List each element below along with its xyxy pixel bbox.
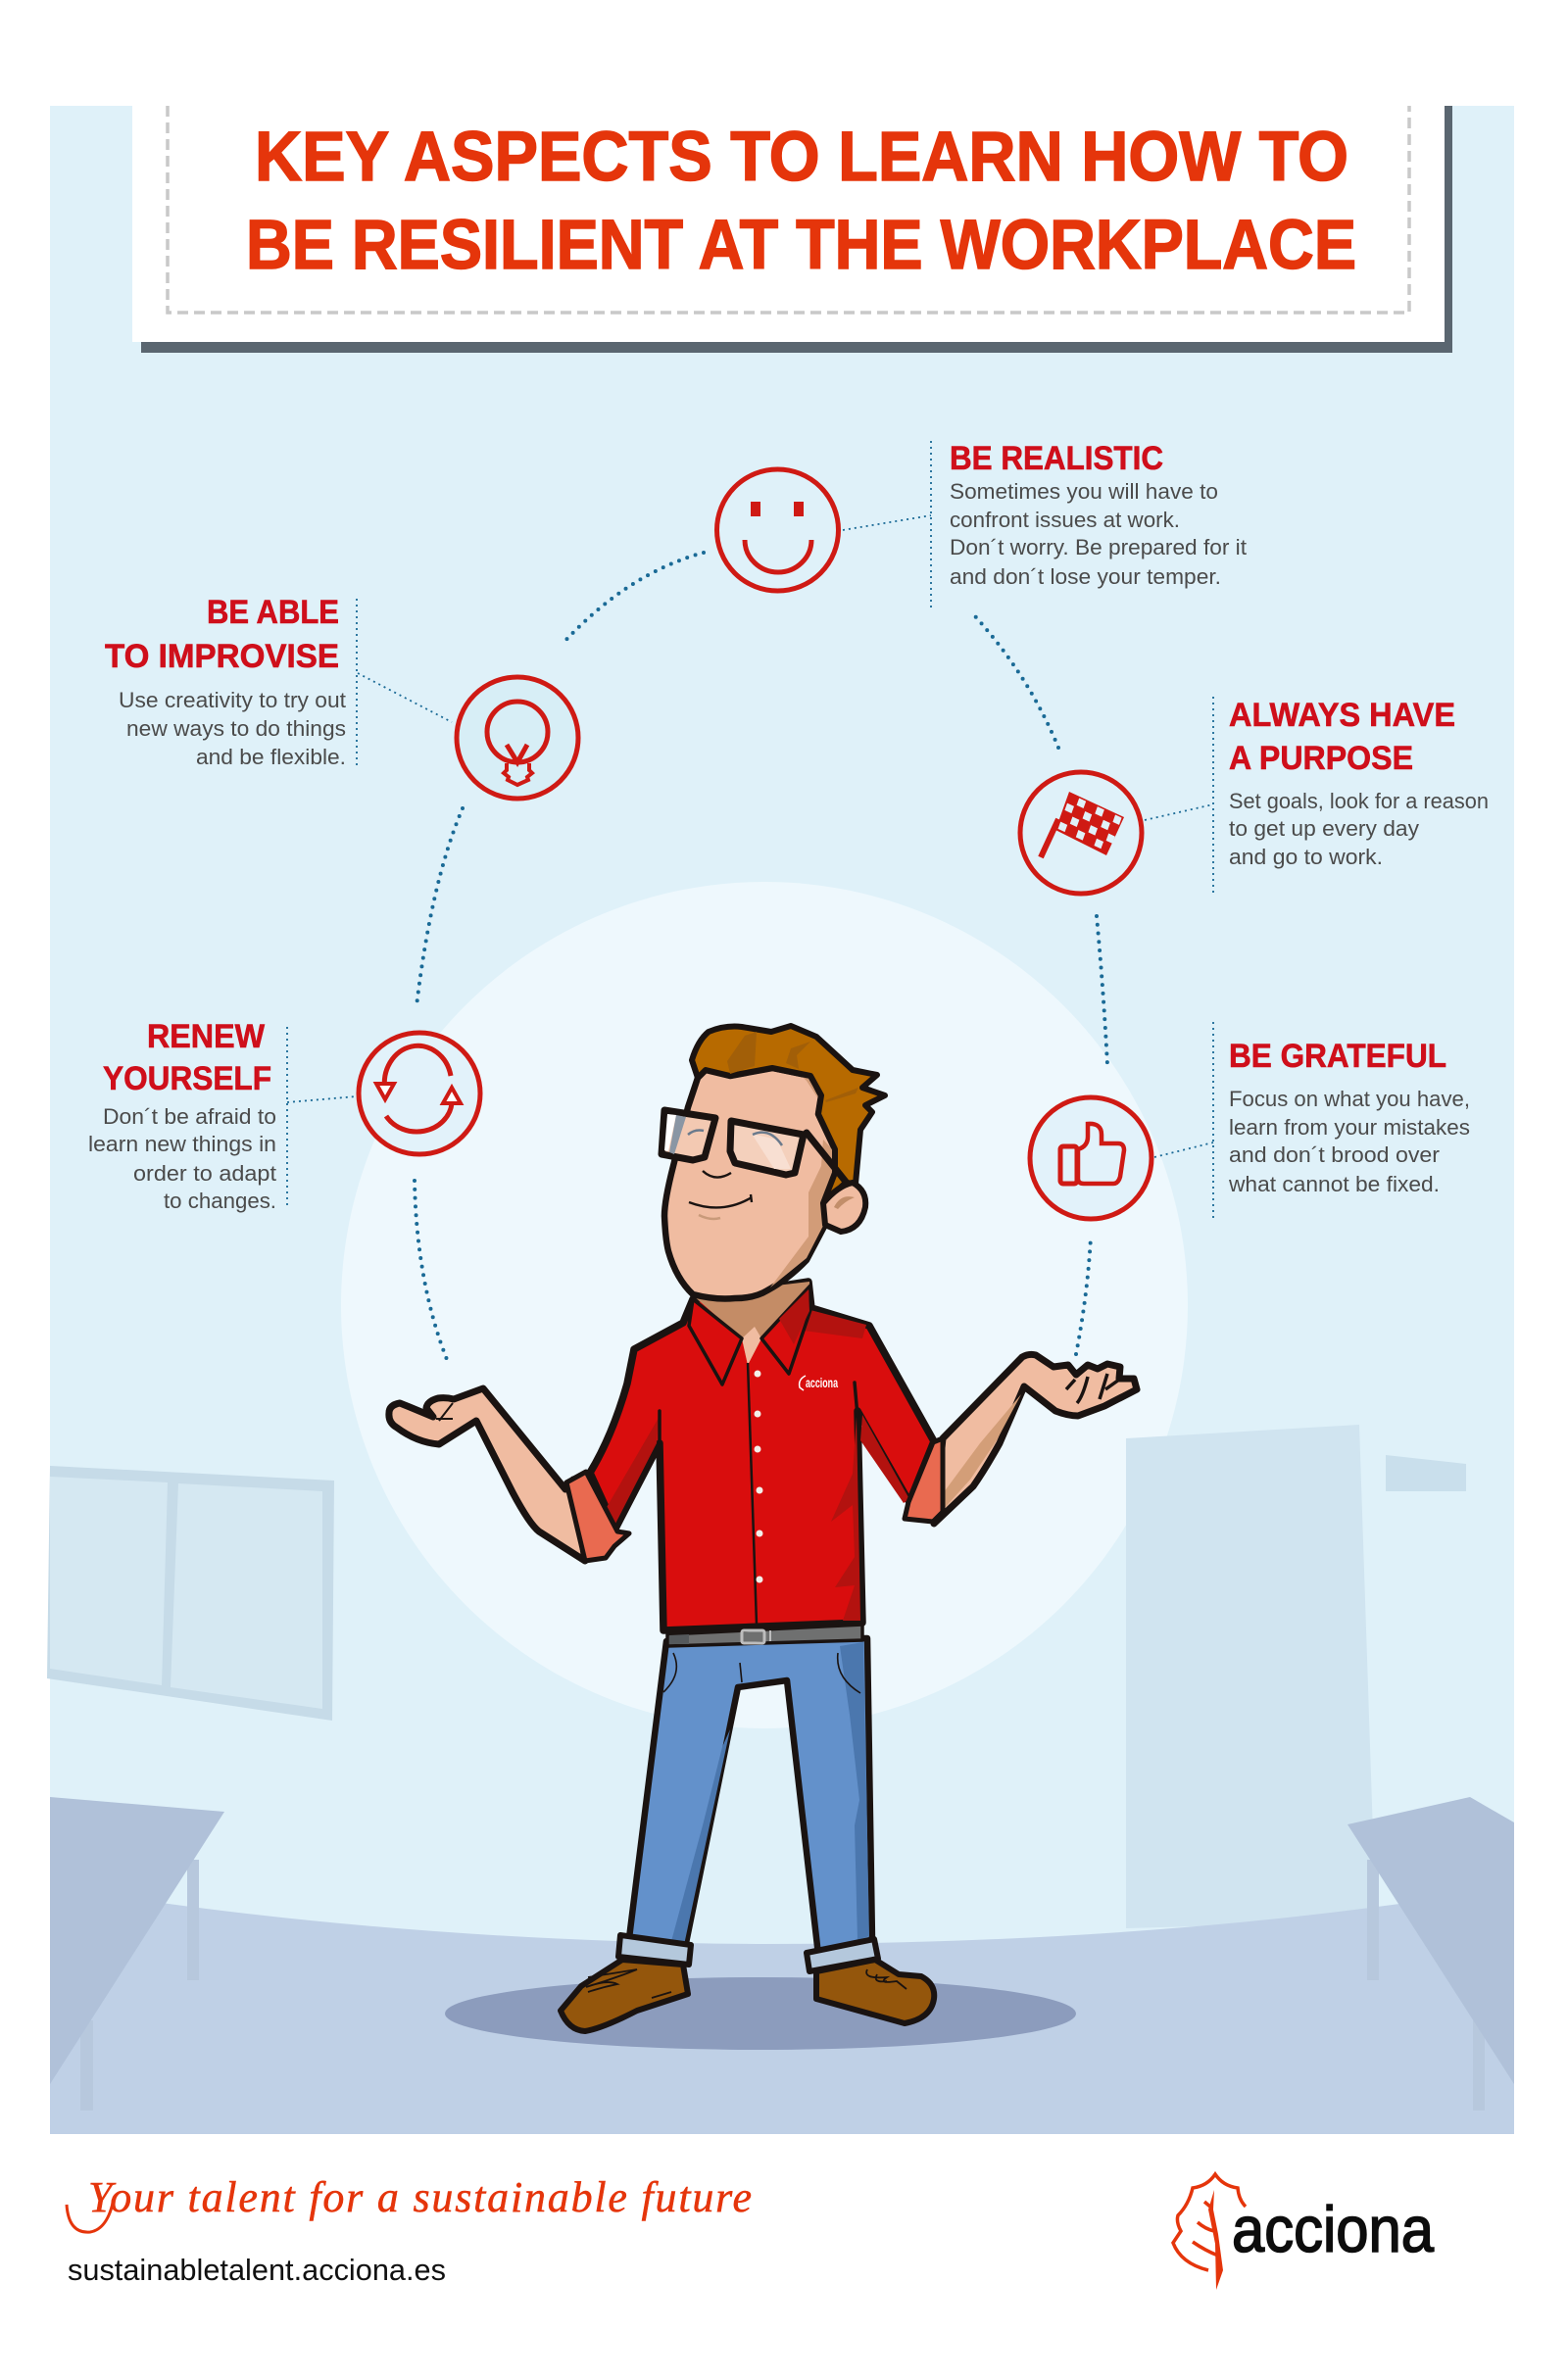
- text block: renew yourself: YOURSELF: [103, 1060, 271, 1097]
- right table: [1348, 1797, 1514, 2111]
- text block: always have a purpose: ALWAYS HAVE: [1229, 697, 1455, 734]
- text block: be grateful: BE GRATEFUL: [1229, 1038, 1446, 1075]
- text block: be realistic: Sometimes you will have to: [950, 479, 1218, 504]
- glasses: [662, 1110, 846, 1182]
- title text line 2: BE RESILIENT AT THE WORKPLACE: [246, 207, 1356, 284]
- window: [47, 1466, 334, 1721]
- text block: be realistic: BE REALISTIC: [950, 440, 1163, 477]
- shirt placket and buttons: [748, 1363, 762, 1625]
- jeans cuffs: [618, 1935, 878, 1971]
- text block: always have a purpose: to get up every day: [1229, 816, 1420, 841]
- floor shadow: [445, 1977, 1076, 2050]
- text block: be able to improvise: TO IMPROVISE: [105, 638, 339, 675]
- floor: [50, 1886, 1514, 2134]
- text block: be realistic: confront issues at work.: [950, 508, 1180, 532]
- text block: renew yourself: RENEW: [147, 1018, 266, 1055]
- acciona logo: [1173, 2174, 1434, 2290]
- left arm and hand: [389, 1388, 585, 1561]
- text block: be realistic: Don´t worry. Be prepared for it: [950, 535, 1248, 559]
- icon: smiley: [717, 469, 839, 591]
- text block: be grateful: [1154, 1022, 1470, 1221]
- spotlight circle: [341, 882, 1188, 1728]
- title banner: [132, 106, 1452, 353]
- logo leaf: [1173, 2174, 1246, 2290]
- logo wordmark: acciona: [1232, 2193, 1434, 2265]
- text block: always have a purpose: and go to work.: [1229, 845, 1383, 869]
- collar: [689, 1286, 810, 1384]
- text block: renew yourself: learn new things in: [88, 1132, 276, 1156]
- icon: checkered flag: [1020, 772, 1142, 894]
- shirt logo: acciona: [806, 1376, 838, 1390]
- neck: [693, 1282, 809, 1365]
- text block: be realistic: [843, 440, 1248, 608]
- text block: be realistic: and don´t lose your temper.: [950, 564, 1221, 589]
- belt: [667, 1625, 862, 1646]
- text block: renew yourself: Don´t be afraid to: [103, 1104, 276, 1129]
- text block: always have a purpose: A PURPOSE: [1229, 740, 1413, 777]
- dotted juggling arc: [415, 553, 1107, 1362]
- text block: be able to improvise: [105, 594, 452, 769]
- text block: renew yourself: order to adapt: [133, 1161, 277, 1186]
- left shoe: [561, 1960, 688, 2031]
- text block: be able to improvise: BE ABLE: [207, 594, 339, 631]
- text block: renew yourself: to changes.: [164, 1189, 276, 1213]
- text block: be grateful: Focus on what you have,: [1229, 1087, 1470, 1111]
- footer url: sustainabletalent.acciona.es: [68, 2253, 446, 2287]
- background panel: office scene: [47, 106, 1514, 2134]
- footer slogan: Your talent for a sustainable future: [88, 2173, 752, 2221]
- text block: always have a purpose: Set goals, look for a reason: [1229, 789, 1489, 813]
- shirt logo: [800, 1376, 838, 1390]
- shirt cuffs: [566, 1438, 943, 1561]
- text block: be grateful: what cannot be fixed.: [1228, 1172, 1440, 1196]
- right arm and hand: [934, 1354, 1137, 1524]
- face: [664, 1068, 835, 1299]
- right shoe: [816, 1960, 934, 2023]
- text block: be able to improvise: new ways to do things: [126, 716, 346, 741]
- hair: [692, 1026, 885, 1203]
- door: [1126, 1425, 1376, 1928]
- title text: KEY ASPECTS TO LEARN HOW TO: [255, 119, 1348, 196]
- character: man juggling: [389, 1026, 1137, 2031]
- shirt: [590, 1282, 934, 1630]
- text block: be able to improvise: and be flexible.: [196, 745, 346, 769]
- left table: [50, 1797, 224, 2111]
- text block: always have a purpose: [1145, 697, 1489, 896]
- text block: be grateful: and don´t brood over: [1229, 1142, 1441, 1167]
- text block: renew yourself: [88, 1018, 357, 1213]
- icon: light bulb: [457, 677, 578, 799]
- jeans: [629, 1638, 872, 1955]
- text block: be able to improvise: Use creativity to try out: [119, 688, 347, 712]
- wall sign: [1386, 1455, 1466, 1491]
- icon: renew arrows: [359, 1033, 480, 1154]
- icon: thumbs up: [1030, 1097, 1152, 1219]
- ear: [823, 1183, 865, 1232]
- text block: be grateful: learn from your mistakes: [1229, 1115, 1470, 1140]
